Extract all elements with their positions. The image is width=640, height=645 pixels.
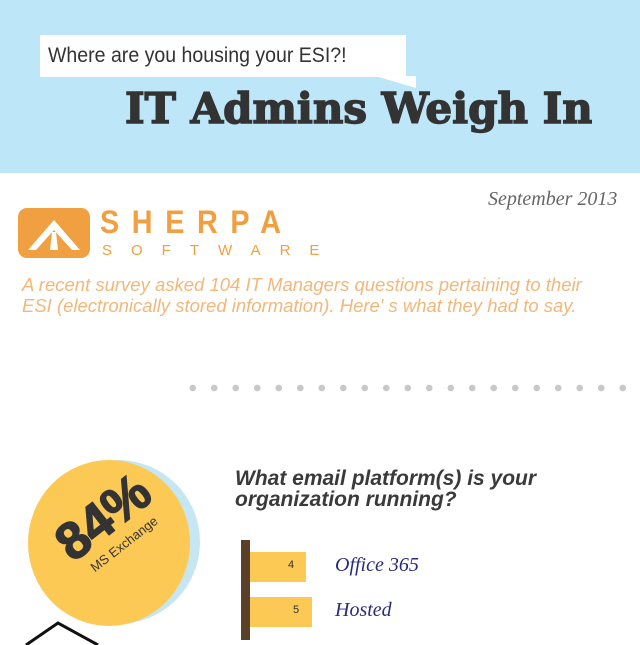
icon: house outline	[25, 621, 99, 645]
stat circle: 84% MS Exchange: MS Exchange	[87, 513, 161, 575]
bar: Hosted: 5	[293, 604, 299, 616]
logo: SOFTWARE	[102, 242, 338, 259]
question heading	[235, 467, 537, 511]
dotted divider	[182, 384, 640, 392]
question heading: What email platform(s) is your	[235, 467, 536, 490]
logo: SHERPA	[100, 204, 293, 240]
logo	[18, 204, 338, 259]
stat circle: 84% MS Exchange	[28, 460, 200, 626]
bar: Office 365	[250, 552, 419, 582]
bar: Hosted	[250, 597, 392, 627]
question heading: organization running?	[235, 488, 457, 511]
title: IT Admins Weigh In	[125, 84, 592, 133]
intro text	[21, 274, 582, 316]
speech bubble: Where are you housing your ESI?!	[48, 44, 347, 67]
bar: Hosted: Hosted	[335, 599, 392, 621]
intro text: A recent survey asked 104 IT Managers questions pertaining to their	[22, 274, 582, 295]
intro text: ESI (electronically stored information). Here' s what they had to say.	[22, 295, 576, 316]
bar: Office 365: Office 365	[335, 554, 419, 576]
stat circle: 84% MS Exchange: 84%	[45, 463, 162, 572]
header band	[0, 0, 640, 173]
bar chart	[241, 540, 419, 640]
speech bubble	[40, 35, 416, 88]
bar: Office 365: 4	[288, 559, 294, 571]
date: September 2013	[488, 188, 617, 210]
icon: logo mark	[18, 208, 90, 258]
